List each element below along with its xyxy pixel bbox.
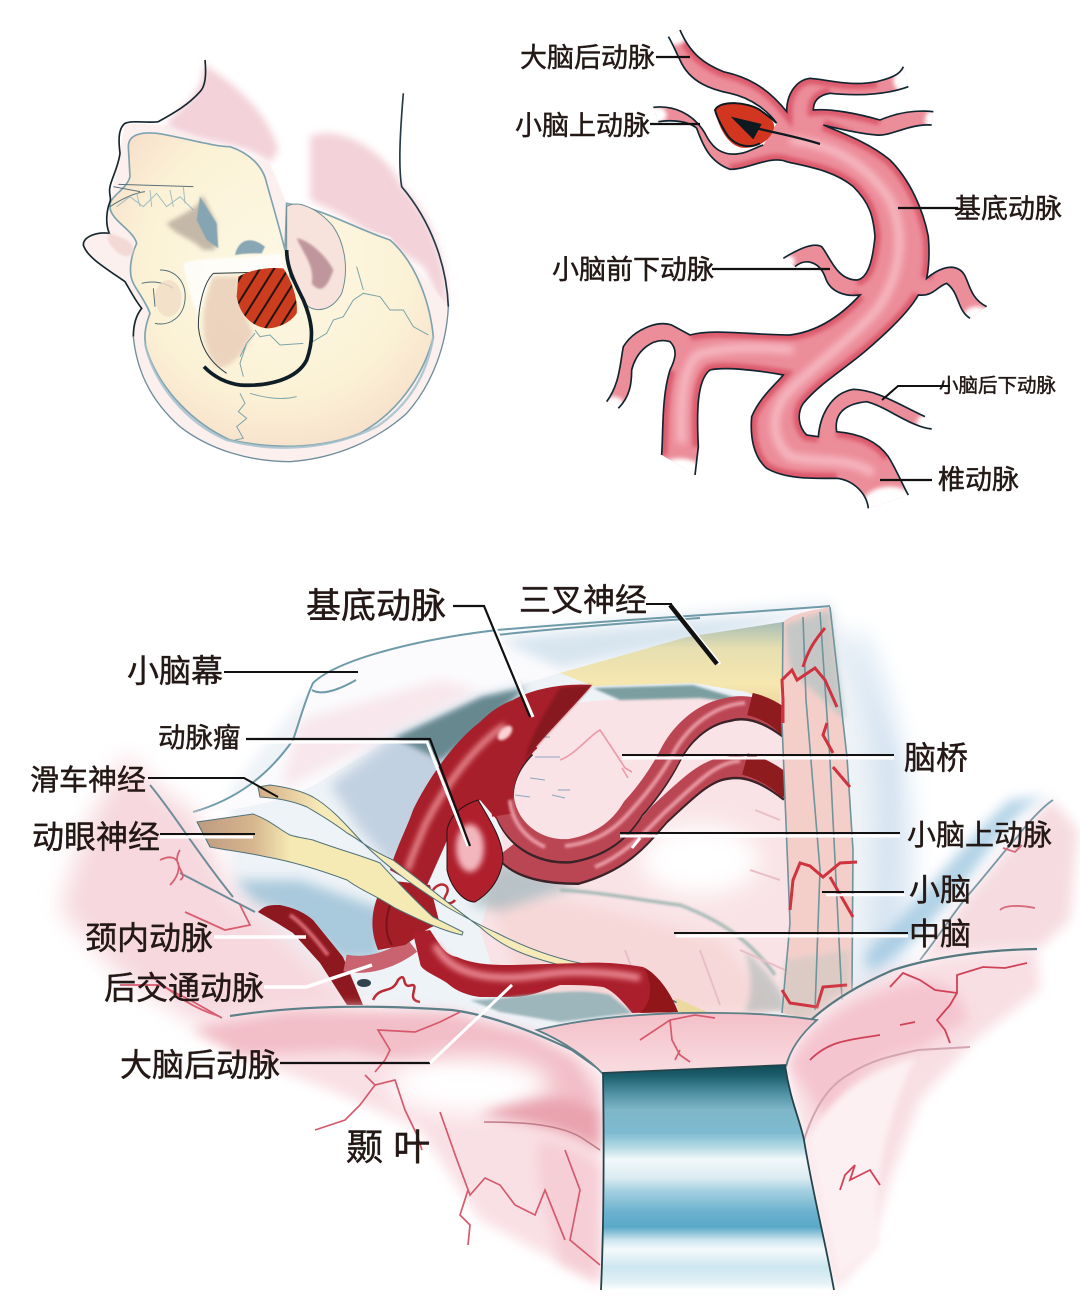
head outline [83,60,206,337]
orbit [142,270,185,324]
right lobe fold [804,1047,970,1140]
dura striations [782,607,853,1013]
temporal upper pink band [195,1012,600,1120]
right lobe lower pink [808,1058,915,1278]
tentorium membrane [193,606,830,812]
label: pons: 脑桥 [904,740,968,776]
label: trochlear nerve [30,764,278,797]
artery body [590,25,990,520]
pons surface vessels [560,730,632,778]
label: posterior inferior cerebellar artery: 小脑后下动脉 [939,375,1057,397]
inner skull rim [145,337,433,448]
aneurysm [715,103,774,148]
pons and midbrain base [480,697,792,1020]
trunk bright spot [495,723,515,743]
temporal blue [235,240,265,255]
label: basilar artery [306,587,533,717]
label: trochlear nerve: 滑车神经 [30,764,146,797]
right upper tissue [920,800,1078,960]
orbit fill [155,280,182,317]
pons highlight [640,825,760,895]
tentorium pink shade [280,680,480,790]
tissue edge line [150,785,255,912]
dura strip bottom shade [782,950,850,1020]
tentorium blue top [500,612,820,668]
label: superior cerebellar artery [620,819,1052,852]
edge shading [662,30,929,478]
grey cleft [330,685,530,870]
temporal fold line [484,1122,600,1150]
tail fades [602,25,990,520]
back head outline [400,93,448,307]
label: trigeminal nerve [519,582,720,664]
temporal highlight [390,1057,550,1113]
temporal lower pink [537,1140,600,1280]
pons small marks [515,737,570,798]
SCA two end [745,764,790,790]
artery outline [607,30,987,508]
temporal lobe [190,1007,603,1285]
right lobe edge [786,949,1037,1066]
aneurysm pointer arrow [731,117,820,144]
superior cerebellar artery one [502,707,790,850]
tentorium wash [230,600,900,1050]
superior cerebellar artery two [506,766,790,872]
cleft between midbrain and pons [560,890,775,975]
nerve tip at right [676,998,707,1012]
blue wash behind dura [845,630,912,1000]
retractor outline [601,1065,834,1290]
right lobe pink band [790,981,968,1120]
trochlear nerve [258,785,700,1012]
eye socket blue [197,197,218,248]
label: midbrain: 中脑 [909,917,971,952]
right tissue edge [920,800,1053,960]
sutures [235,267,428,440]
label: trigeminal nerve: 三叉神经 [519,582,647,618]
lower head outline [133,307,448,462]
ear [287,204,345,310]
cheek bone outline [110,184,193,207]
label: basilar artery: 基底动脉 [306,587,446,626]
label: vertebral artery [880,465,1019,495]
superior cerebellar artery one outline [502,709,790,852]
right lobe vessels [810,963,1027,1190]
blue under nerves [235,880,385,960]
label: tentorium: 小脑幕 [127,653,223,689]
trigeminal lower shade [593,685,760,705]
head fill [83,123,448,462]
SCA highlights [510,703,745,867]
basilar trunk [390,685,592,890]
labels: surgical view [30,582,1052,1168]
nose [108,233,133,256]
label: superior cerebellar artery: 小脑上动脉 [515,111,650,141]
labels: top right artery [515,43,1062,495]
temporal edge [230,1007,603,1072]
label: posterior cerebral artery: 大脑后动脉 [520,43,655,73]
illustration: basilar artery system [590,25,990,520]
flap outline [198,272,283,373]
trunk dark side [525,685,592,760]
left pink tissue [60,755,362,1025]
label: vertebral artery: 椎动脉 [938,465,1019,495]
grey strip under aneurysm [470,860,580,910]
fine folds [625,810,785,1005]
SCA one end [750,704,790,727]
trunk lower segment [372,880,440,950]
brain surface vessels [120,985,715,1265]
SCA loop root [502,740,530,815]
scalp pink wash [167,63,447,317]
incision line [204,250,311,385]
midline tissue [537,1013,817,1074]
trigeminal nerve [560,622,783,710]
eye socket shadow [167,193,217,250]
PCA dark end [640,968,678,1013]
label: oculomotor nerve: 动眼神经 [32,819,160,855]
illustration: skull with craniotomy [83,60,448,462]
label: posterior communicating artery [104,965,372,1006]
label: cerebellum: 小脑 [909,873,971,908]
label: aneurysm: 动脉瘤 [158,722,240,753]
carotid highlight [290,915,328,955]
left tissue vessels [150,850,250,1016]
right lower lobe [786,949,1040,1290]
right tissue blue edge [865,795,1058,970]
label: internal carotid artery: 颈内动脉 [85,920,213,956]
right tissue vessels [1000,845,1035,910]
posterior communicating artery [345,945,412,964]
PCA highlight [435,945,640,978]
dura vessels [782,628,857,1007]
label: posterior inferior cerebellar artery [882,375,1057,400]
label: posterior cerebral artery: 大脑后动脉 [120,1047,280,1083]
label: aneurysm [158,722,470,846]
illustration: surgical view [60,600,1078,1290]
label: posterior cerebral artery [120,985,512,1083]
aneurysm sac [447,800,503,902]
label: superior cerebellar artery: 小脑上动脉 [907,819,1052,852]
grey strip below PCA [470,992,632,1022]
retractor [601,1065,834,1290]
basal cistern dark spot [357,979,371,987]
trunk highlight [408,725,505,870]
posterior cerebral artery [413,930,678,1013]
dura strip [782,607,853,1020]
tentorium outline [193,606,830,812]
superior cerebellar artery two outline [506,768,790,874]
label: posterior communicating artery: 后交通动脉 [104,970,264,1006]
skull bone [110,133,433,446]
lower trunk highlight [386,905,392,945]
label: anterior inferior cerebellar artery: 小脑前下动脉 [552,255,714,285]
oculomotor nerve [197,814,463,935]
dura strip top shade [785,610,845,720]
aneurysm rim [715,103,776,146]
zygoma white [183,253,283,317]
temporal fold pink [480,1099,600,1150]
maxilla sutures [117,187,193,210]
label: basilar artery: 基底动脉 [954,194,1062,224]
ear inner [297,238,333,289]
soft grey near midbrain base [745,950,785,1012]
perforators [373,885,455,1002]
label: temporal lobe: 颞 叶 [346,1127,430,1168]
aneurysm highlight [456,824,484,872]
artery highlight [681,140,899,473]
midbrain shading [490,898,780,1015]
hatched exposure [237,268,297,328]
internal carotid artery [258,905,363,1005]
re-applied pink wash [167,70,273,153]
dark cleft top [395,688,525,760]
flap interior shading [203,277,253,367]
